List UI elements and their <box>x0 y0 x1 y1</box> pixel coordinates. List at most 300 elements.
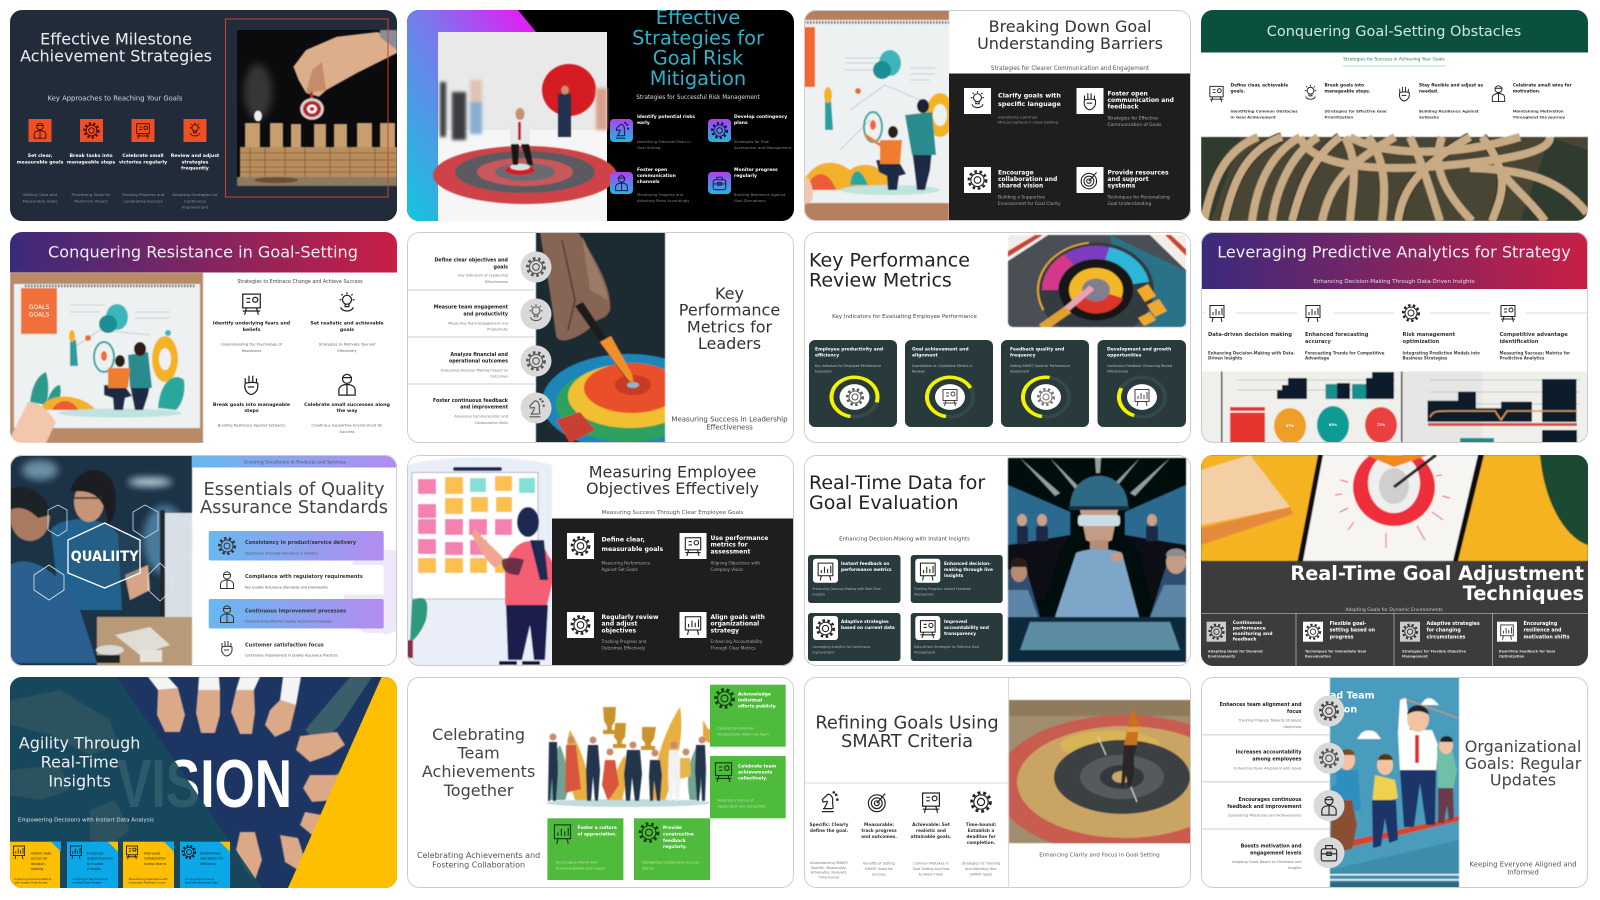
list: four metric rows with icon circles <box>407 252 552 425</box>
items: four strategies: beliefs <box>243 327 261 333</box>
title: Effective Milestone <box>40 30 192 48</box>
items: four approaches: victories regularly <box>119 159 167 165</box>
columns: four techniques: Environments <box>1208 654 1235 658</box>
columns: four techniques: Adapting Goals for Dynamic <box>1208 649 1263 653</box>
items: four SMART criteria: completion. <box>967 840 996 846</box>
tiles: four benefits: with Instant Data Access <box>14 881 48 885</box>
items: four approaches: Celebrate small <box>122 153 164 159</box>
panel: Key Performance Review Metrics <box>804 232 1191 443</box>
tiles: four benefits: responsiveness <box>87 857 113 861</box>
rows: four quality items: Continuous Improvement in Quality Assurance Practices <box>245 653 338 657</box>
items: four strategies <box>213 292 390 434</box>
tiles: four benefits: Instant data <box>31 852 51 856</box>
columns: four techniques: for changing <box>1426 628 1461 634</box>
feature cards: Data-Driven Strategies for Effective Goal <box>914 645 979 649</box>
items: four SMART criteria: and Adjusting Your <box>965 867 997 871</box>
items: four benefits timeline: accuracy <box>1305 339 1331 345</box>
items: four SMART criteria: Understanding SMART: <box>810 861 848 865</box>
photo: woman with visor and data screens <box>1008 458 1186 662</box>
partial slide text in illustration: ad Team <box>1330 690 1375 702</box>
metric cards with progress rings: Key Indicators for Employee Performance <box>815 364 881 368</box>
items: four strategies: Monitor progress <box>734 167 778 173</box>
items: four strategies: steps <box>244 408 259 414</box>
list: four benefit rows with icon circles: focus <box>1287 709 1302 715</box>
title: Updates <box>1490 771 1556 790</box>
metric cards with progress rings: Goal achievement and <box>912 346 969 352</box>
photo: hand placing target on wooden blocks <box>237 30 397 186</box>
tiles: four benefits: decision- <box>31 862 47 866</box>
panel: Agility Through Real-Time Insights <box>10 677 397 888</box>
items: four strategies: Adjusting Plans Accordingly <box>637 198 690 203</box>
items: four SMART criteria: and outcomes. <box>861 834 897 840</box>
items: four obstacles: Stay flexible and adjust as <box>1419 82 1484 88</box>
items: four approaches: Improvement <box>182 205 209 210</box>
green tiles: four practices: Achievements Within the Team <box>718 732 769 736</box>
title: Real-Time <box>41 752 119 772</box>
chart percentage labels: 65% <box>1329 423 1338 427</box>
title: Real-Time Goal Adjustment <box>1290 562 1584 585</box>
items: four obstacles: Define clear, achievable <box>1230 82 1288 88</box>
items: four approaches: Break tasks into <box>69 153 113 159</box>
teal overlay shape <box>10 677 262 888</box>
dark panel with items: metrics for <box>710 542 748 549</box>
list: four metric rows with icon circles: Measure team engagement <box>434 304 509 310</box>
subtitle: Enhancing Decision-Making with Instant Insights <box>839 537 970 543</box>
columns: four techniques: monitoring and <box>1233 631 1272 637</box>
dark panel with items: Define clear, <box>602 536 645 544</box>
title: Celebrating <box>432 725 525 744</box>
columns: four techniques: Encouraging <box>1524 621 1558 627</box>
illustration: goals notebook <box>10 272 203 443</box>
items: four SMART criteria: realistic and <box>916 828 946 834</box>
title: Goals: Regular <box>1465 754 1582 773</box>
items: four approaches: Prioritizing Tasks for <box>72 192 111 197</box>
tiles: four benefits: Enhancing Decision-Making <box>14 877 52 881</box>
items: four benefits timeline: Forecasting Trends for Competitive <box>1305 350 1385 356</box>
items: four strategies: Set realistic and achievable <box>310 320 384 326</box>
panel: Key Performance Metrics for Leaders <box>407 232 794 443</box>
green tiles: four practices: of appreciation. <box>578 832 617 838</box>
feature cards: making through live <box>944 567 993 573</box>
dark panel with items: specific language <box>998 100 1062 108</box>
dark panel with items: Identifying Common <box>998 114 1038 120</box>
items: four approaches: frequently <box>181 166 209 172</box>
photo: hand with pencil on colour wheel <box>535 233 666 442</box>
green tiles: four practices: achievements <box>738 770 773 776</box>
items: four strategies: Strategies to Motivate Yourself <box>319 342 376 346</box>
feature cards: Insights <box>812 592 825 596</box>
title: Organizational <box>1465 737 1581 756</box>
columns: four techniques: Strategies for Flexible Objective <box>1402 649 1467 653</box>
items: four obstacles: Prioritization <box>1324 114 1353 120</box>
panel: Celebrating Team Achievements Together <box>407 677 794 888</box>
title: Refining Goals Using <box>815 712 999 734</box>
list: four benefit rows with icon circles: among employees <box>1252 756 1302 762</box>
items: four strategies: channels <box>637 179 660 185</box>
items: four strategies: Identifying Potential Risks in <box>637 139 691 144</box>
items: four approaches: measurable goals <box>17 159 64 165</box>
dark panel with items: Tracking Progress and <box>600 639 647 644</box>
green tiles: four practices: Highlighting Collaborative Success <box>642 861 699 865</box>
items: four strategies: Assessment and Management <box>734 145 792 150</box>
items: four strategies: Foster open <box>637 167 667 173</box>
items: four obstacles: Break goals into <box>1324 82 1364 88</box>
columns: four techniques: Adaptive strategies <box>1426 621 1480 627</box>
dark panel with items: Outcomes Effectively <box>602 646 646 651</box>
items: four benefits timeline: optimization <box>1402 339 1440 345</box>
items: four SMART criteria: Goal Setting and How <box>913 867 950 871</box>
title: Team <box>456 744 500 762</box>
items: four strategies: Monitoring Progress and <box>637 192 684 197</box>
items: four strategies: Identify underlying fears and <box>213 320 290 326</box>
items: four strategies: Celebrate small successes along <box>304 402 390 408</box>
list: four benefit rows with icon circles: Enhances team alignment and <box>1220 702 1302 708</box>
metric cards with progress rings: Development and growth <box>1107 346 1171 352</box>
green tiles: four practices: feedback <box>663 838 686 844</box>
list: four benefit rows with icon circles: Boosts motivation and <box>1241 843 1302 849</box>
columns: four techniques: resilience and <box>1524 628 1562 634</box>
panel: Effective Strategies for Goal Risk Mitigation <box>407 10 794 221</box>
items: four SMART criteria: SMART Goals <box>970 873 992 877</box>
subtitle: Enhancing Decision-Making Through Data-Driven Insights <box>1313 279 1475 285</box>
subtitle: Strategies for Successful Risk Management <box>636 95 760 101</box>
feature cards: Management <box>914 650 936 654</box>
list: four metric rows with icon circles: and productivity <box>463 311 509 317</box>
notebook tab label: GOALS <box>29 312 49 318</box>
items: four obstacles: Maintaining Motivation <box>1513 108 1564 114</box>
list: four metric rows with icon circles: Productivity <box>487 328 508 332</box>
panel: Effective Milestone Achievement Strategies <box>10 10 397 221</box>
title: Review Metrics <box>809 270 952 292</box>
items: four SMART criteria: Common Mistakes in <box>913 862 949 866</box>
title: Insights <box>48 772 111 790</box>
tiles: four benefits: making <box>31 867 43 871</box>
tiles: four benefits: efficiency <box>200 862 216 866</box>
items: four SMART criteria: to Avoid Them <box>919 873 944 877</box>
list: four metric rows with icon circles: operational outcomes <box>449 359 508 365</box>
title: Techniques <box>1463 582 1584 605</box>
dark panel with items: communication and <box>1108 97 1174 104</box>
title: Measuring Employee <box>589 462 756 482</box>
columns: four techniques: Techniques for Immediate Goal <box>1305 649 1366 653</box>
yellow accent shape <box>288 677 397 888</box>
items: four benefits timeline: Integrating Predictive Models into <box>1402 350 1480 356</box>
columns: four techniques: Optimization <box>1499 654 1525 658</box>
subtitle: Adapting Goals for Dynamic Environments <box>1345 607 1443 613</box>
items: four SMART criteria: Benefits of Setting <box>863 862 895 866</box>
title: Assurance Standards <box>200 497 388 518</box>
dark panel with items: Encourage <box>998 169 1034 176</box>
illustration: cartoon team on rising arrow <box>1330 677 1459 888</box>
chart percentage labels: 72% <box>1377 423 1386 427</box>
items: four obstacles: Building Resilience Against <box>1419 108 1479 114</box>
hexagon: quality badge: QUALIITY <box>71 549 139 565</box>
items: four SMART criteria: define the goal. <box>810 828 848 834</box>
items: four strategies: Building Resilience Against <box>734 192 786 197</box>
items: four strategies: goals <box>340 327 354 333</box>
metric cards with progress rings: Continuous Feedback: Enhancing Review <box>1107 364 1173 368</box>
panel: Conquering Goal-Setting Obstacles <box>1201 10 1588 221</box>
green tiles: four practices: collectively. <box>738 776 768 782</box>
divider lines <box>804 677 1009 888</box>
dark panel with items: Goal Understanding <box>1108 201 1151 207</box>
subtitle: Key Indicators for Evaluating Employee Performance <box>832 314 977 320</box>
green tiles: four practices: individual <box>738 698 763 704</box>
items: four strategies: Effectively <box>337 349 357 353</box>
list: four metric rows with icon circles: and improvement <box>460 405 509 411</box>
dark panel with items: Techniques for Personalizing <box>1106 194 1170 200</box>
items: four benefits timeline: Data-driven decision making <box>1208 332 1292 338</box>
title: Key <box>715 284 744 303</box>
title: Achievement Strategies <box>20 46 212 66</box>
dark panel with items: Communication of Goals <box>1108 122 1162 128</box>
items: four SMART criteria: Establish a <box>968 828 994 834</box>
columns: four techniques: Reevaluation <box>1305 654 1331 658</box>
items: four obstacles: needed. <box>1419 88 1439 94</box>
items: four benefits timeline: Predictive Analytics <box>1500 355 1545 360</box>
feature cards: insights <box>944 573 964 579</box>
subtitle: Measuring Success in Leadership <box>671 416 788 424</box>
rows: four quality items: Key Quality Assurance Standards and Frameworks <box>245 585 328 589</box>
feature cards: based on current data <box>841 625 895 631</box>
items: four SMART criteria: attainable goals. <box>911 834 952 840</box>
title: Leaders <box>698 334 761 353</box>
items: four SMART criteria: Measurable: <box>864 822 894 828</box>
subtitle: Enhancing Clarity and Focus in Goal Setting <box>1039 852 1160 858</box>
items: four obstacles: Identifying Common Obstacles <box>1230 108 1298 114</box>
green tiles: four practices: Appreciation and Recognition <box>718 804 766 808</box>
tiles: four benefits: access for <box>31 857 48 861</box>
dark panel with items: strategy <box>710 627 739 634</box>
green tiles: four practices: Foster a culture <box>578 825 617 831</box>
items: four SMART criteria: Achievable, Relevant, <box>811 871 847 875</box>
dark panel with items: feedback <box>1108 104 1139 111</box>
dark panel with items: Regularly review <box>602 614 659 621</box>
tiles: four benefits: to market <box>87 862 104 866</box>
dark panel with items: Environment for Goal Clarity <box>998 201 1061 207</box>
columns: four techniques: progress <box>1330 634 1354 640</box>
list: four metric rows with icon circles: Key Indicators of Leadership <box>458 273 509 277</box>
tiles: four benefits: Actionable Feedback Loops <box>129 881 166 885</box>
feature cards <box>808 555 1003 661</box>
feature cards: transparency <box>944 631 976 637</box>
header strip <box>192 455 397 468</box>
dark panel with items <box>552 518 794 666</box>
subtitle: Strategies for Clearer Communication and Engagement <box>991 66 1150 72</box>
items: four strategies: the way <box>337 408 357 414</box>
items: four strategies: Understanding the Psychology of <box>221 342 283 346</box>
items: four obstacles: Throughout the Journey <box>1513 114 1566 120</box>
dark panel with items: Foster open <box>1108 90 1148 97</box>
items: four obstacles <box>1210 82 1572 120</box>
items: four benefits timeline: Advantage <box>1305 355 1330 360</box>
title: Conquering Goal-Setting Obstacles <box>1267 24 1521 40</box>
metric cards with progress rings: Evaluation <box>815 370 832 374</box>
items: four benefits timeline: identification <box>1500 339 1539 345</box>
items: four SMART criteria: SMART Goals for <box>865 867 894 871</box>
items: four SMART criteria: deadline for <box>966 834 997 840</box>
panel: Real-Time Data for Goal Evaluation <box>804 455 1191 666</box>
title: Conquering Resistance in Goal-Setting <box>48 242 358 262</box>
items: four strategies: plans <box>734 120 748 126</box>
dark panel with items: Clarify goals with <box>998 91 1061 99</box>
feature cards: Improvement <box>812 650 835 654</box>
dark panel with items: Aligning Objectives with <box>710 560 760 565</box>
list: four benefit rows with icon circles: Encourages continuous <box>1239 797 1302 803</box>
subtitle: Strategies for Success in Achieving Your Goals <box>1343 56 1446 62</box>
columns: four techniques: motivation shifts <box>1524 634 1570 640</box>
title: Together <box>443 781 514 800</box>
title: Breaking Down Goal <box>989 17 1151 36</box>
items: four SMART criteria: Specific, Measurable, <box>811 866 847 870</box>
feature cards: Enhancing Decision-Making with Real-Time <box>812 587 881 591</box>
gradient accent shape <box>407 10 536 221</box>
strip text: Ensuring Excellence in Products and Services <box>244 460 347 466</box>
tiles: four benefits: Adapting to Rapid Change <box>72 877 108 881</box>
dark panel with items: shared vision <box>998 183 1043 190</box>
title: Real-Time Data for <box>809 472 985 494</box>
illustration: notebook with analysts <box>804 10 954 221</box>
items: four strategies: Strategies for Risk <box>734 139 770 144</box>
tiles: four benefits: Aligning Resources to <box>185 877 214 881</box>
partial slide text in illustration: tion <box>1336 704 1357 716</box>
items: four approaches: Celebrating Success <box>123 198 163 204</box>
items: four strategies: Creating a Supportive Environment for <box>311 424 383 428</box>
green tiles: four practices: Acknowledge <box>738 692 771 698</box>
items: four SMART criteria: track progress <box>861 828 897 834</box>
list: four metric rows with icon circles: Outcomes <box>490 375 508 379</box>
dark panel with items: Provide resources <box>1108 169 1169 176</box>
list: four metric rows with icon circles: Measuring Team Engagement and <box>448 321 508 325</box>
items: four strategies: Break goals into manageable <box>213 402 290 408</box>
items: four benefits timeline: Risk management <box>1402 332 1456 338</box>
tiles: four benefits: collaboration <box>144 857 166 861</box>
feature cards: Enhanced decision- <box>944 561 991 567</box>
list: four metric rows with icon circles: Define clear objectives and <box>434 258 509 264</box>
feature cards: Adaptive strategies <box>841 619 889 625</box>
decorative frame <box>226 19 388 197</box>
metric cards with progress rings: Effectiveness <box>1107 370 1129 374</box>
subtitle: Measuring Success Through Clear Employee Goals <box>602 510 743 516</box>
items: four benefits timeline: Business Strategies <box>1402 355 1448 360</box>
dark panel with items: and adjust <box>602 621 637 628</box>
tiles: four benefits: Improved <box>144 852 160 856</box>
columns: four techniques: feedback <box>1233 636 1257 642</box>
list: four benefit rows with icon circles: Enhancing Team Alignment with Goals <box>1234 766 1302 770</box>
dark panel with items: and support <box>1108 176 1149 183</box>
items: four strategies: Resistance <box>242 349 262 353</box>
title: Objectives Effectively <box>586 479 759 498</box>
image: analytics dashboard <box>1201 372 1588 444</box>
metric cards with progress rings: frequency <box>1010 352 1036 358</box>
items: four approaches: strategies <box>182 159 209 165</box>
items: four approaches: Maximum Impact <box>74 198 108 204</box>
tiles: four benefits: Streamlined <box>200 852 221 856</box>
dark panel with items: Building a Supportive <box>998 194 1045 200</box>
metric cards with progress rings: opportunities <box>1107 352 1142 358</box>
metric cards with progress rings: efficiency <box>815 352 839 358</box>
list: four metric rows with icon circles: Foster continuous feedback <box>433 398 509 404</box>
items: four benefits timeline <box>1198 305 1587 360</box>
list: four metric rows with icon circles: Collaboration Skills <box>475 421 508 425</box>
title: Mitigation <box>650 67 746 90</box>
subtitle: Empowering Decisions with Instant Data Analysis <box>18 818 154 824</box>
panel: Conquering Resistance in Goal-Setting <box>10 232 397 443</box>
items: four strategies: communication <box>637 173 676 179</box>
panel: Organizational Goals: Regular Updates <box>1201 677 1588 888</box>
photo: hands around table with VISION letters <box>10 677 380 880</box>
items: four approaches: Set clear, <box>28 153 52 159</box>
feature cards: Instant feedback on <box>841 561 889 567</box>
feature cards: Mechanisms <box>914 592 934 596</box>
metric cards with progress rings: Setting SMART Goals for Performance <box>1010 364 1070 368</box>
items: four obstacles: in Goal Achievement <box>1230 114 1276 120</box>
green tiles: four practices: Acknowledgment and Support <box>556 866 607 870</box>
dark panel with items: objectives <box>602 627 637 634</box>
dark panel with items: Use performance <box>710 535 768 542</box>
header band <box>10 232 397 272</box>
items: four strategies: regularly <box>734 173 757 179</box>
header band <box>1201 10 1588 52</box>
items: four approaches: Review and adjust <box>171 153 220 159</box>
items: four obstacles: Strategies for Effective Goal <box>1324 108 1387 114</box>
items: four approaches: Tracking Progress and <box>121 192 165 197</box>
dark panel with items: Align goals with <box>710 614 765 621</box>
title: Metrics for <box>687 317 772 336</box>
tiles: four benefits: Enhanced <box>87 852 103 856</box>
metric cards with progress rings: alignment <box>912 352 938 358</box>
items: four approaches: Measurable Goals <box>23 198 57 204</box>
green tiles: four practices: efforts publicly. <box>738 704 777 710</box>
feature cards: Leveraging Analytics for Continuous <box>812 645 870 649</box>
list: four metric rows with icon circles: goals <box>494 264 508 270</box>
panel: Measuring Employee Objectives Effectively <box>407 455 794 666</box>
list: four benefit rows with icon circles: Insights <box>1288 866 1302 870</box>
photo: figure standing on target <box>433 32 617 221</box>
items: four benefits timeline: Competitive advantage <box>1500 332 1568 338</box>
items: four strategies: early <box>637 120 650 126</box>
list: four benefit rows with icon circles: Celebrating Milestones and Achievements <box>1228 814 1302 818</box>
dark panel with items: systems <box>1108 183 1136 190</box>
columns: four techniques: Management <box>1402 654 1428 658</box>
items: four obstacles: goals. <box>1230 88 1245 94</box>
rows: four quality items: Continuous improvement processes <box>245 609 346 615</box>
items: four approaches: Setting Clear and <box>23 192 57 197</box>
feature cards: Tracking Progress: Instant Feedback <box>913 587 971 591</box>
header band <box>1201 232 1588 289</box>
columns: four techniques: Flexible goal- <box>1330 621 1366 627</box>
title: Agility Through <box>19 734 140 752</box>
title: Leveraging Predictive Analytics for Strategy <box>1217 242 1571 262</box>
list: four benefit rows with icon circles: feedback and improvement <box>1227 804 1302 810</box>
panel: Essentials of Quality Assurance Standards <box>10 455 397 666</box>
panel: Leveraging Predictive Analytics for Strategy <box>1201 232 1588 443</box>
green tiles: four practices: Encouraging Peer-to-Peer <box>556 861 598 865</box>
columns: four techniques: Continuous <box>1233 620 1262 626</box>
items: four benefits timeline: Driven Insights <box>1208 355 1243 360</box>
hexagon: quality badge <box>34 505 172 601</box>
subtitle: Effectiveness <box>706 424 753 432</box>
metric cards with progress rings: Quantitative vs. Qualitative Metrics in <box>912 364 972 368</box>
green tiles: four practices: Provide <box>663 825 682 831</box>
feature cards: accountability and <box>944 625 989 631</box>
title: Achievements <box>422 762 535 781</box>
list: four benefit rows with icon circles <box>1201 696 1344 870</box>
items: four strategies: Develop contingency <box>734 114 787 120</box>
subtitle: Strategies to Embrace Change and Achieve Success <box>237 279 363 285</box>
items: four strategies: Goal Disruptions <box>734 198 765 203</box>
dark panel with items: organizational <box>710 621 759 628</box>
